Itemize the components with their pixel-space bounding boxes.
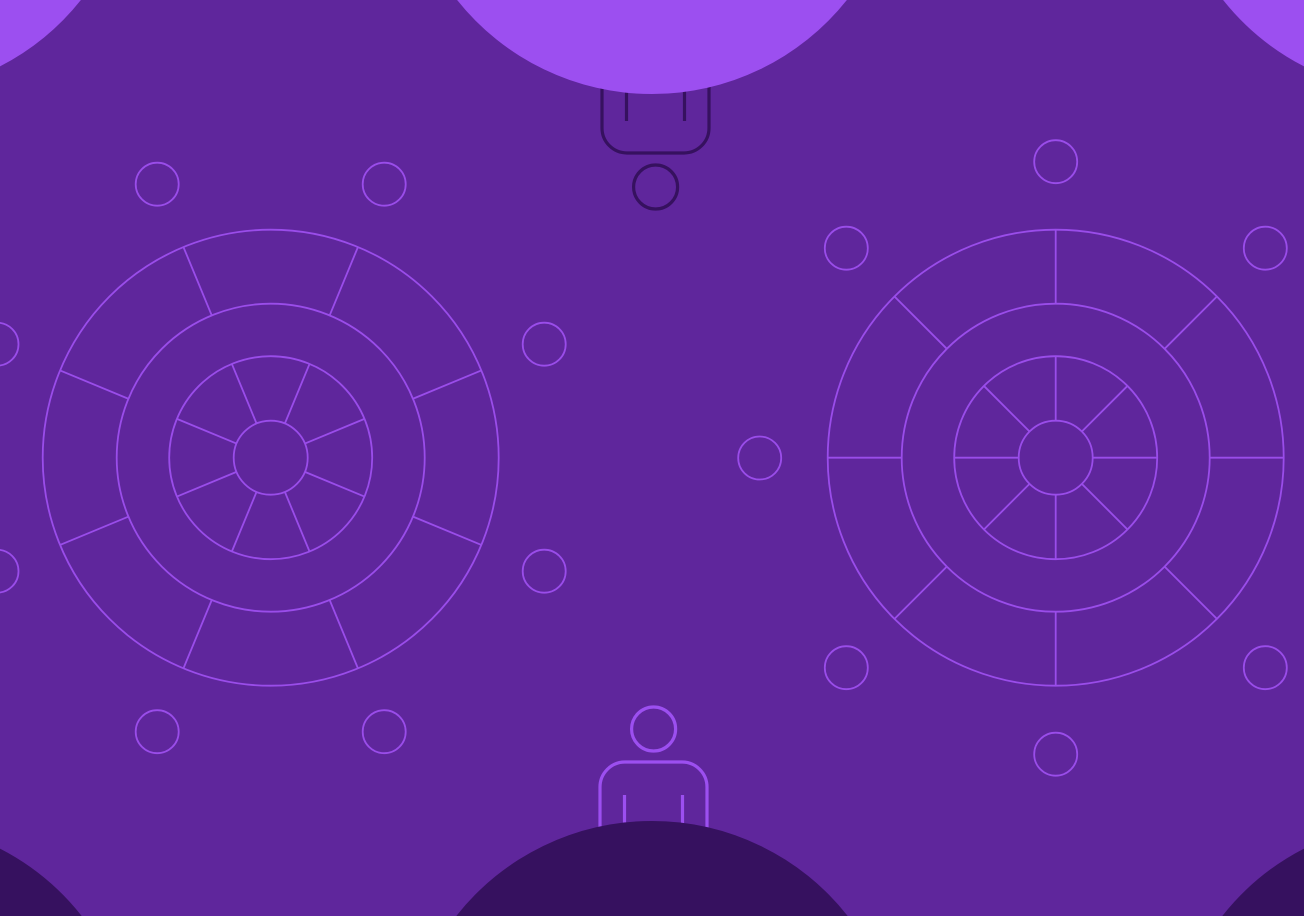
icon: dark person (top, partly hidden) bbox=[602, 80, 709, 209]
small circles around left wheel bbox=[0, 163, 566, 753]
bottom dark circles bbox=[0, 821, 1304, 916]
top light circles bbox=[0, 0, 1304, 94]
icon: light person (bottom, partly hidden) bbox=[600, 707, 707, 835]
small circles around right wheel bbox=[738, 140, 1287, 776]
left wheel bbox=[43, 230, 499, 686]
right wheel bbox=[828, 230, 1284, 686]
